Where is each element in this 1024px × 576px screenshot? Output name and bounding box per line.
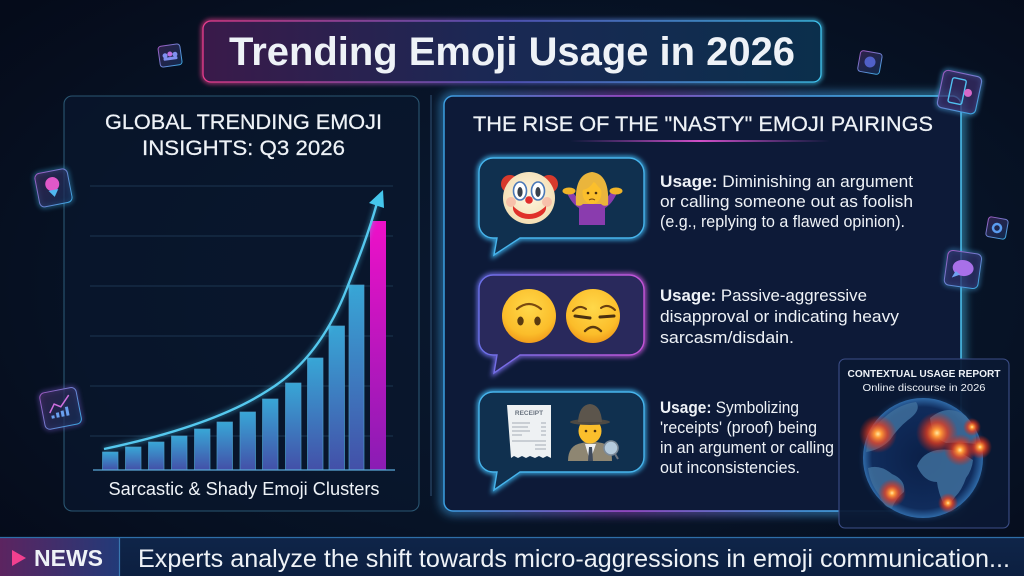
title banner bbox=[203, 21, 821, 82]
icon: detective bbox=[568, 404, 618, 461]
icon: unamused face bbox=[566, 289, 620, 343]
usage text 3: 'receipts' (proof) being bbox=[660, 419, 817, 437]
usage text 3: in an argument or calling bbox=[660, 439, 834, 457]
floating icon: phone bbox=[936, 69, 983, 115]
usage text 1: or calling someone out as foolish bbox=[660, 193, 913, 211]
icon: play triangle bbox=[12, 550, 26, 566]
usage text 3: Usage: Symbolizing bbox=[660, 399, 799, 417]
trend arrow bbox=[104, 190, 384, 449]
icon: clown face bbox=[501, 172, 558, 224]
report heading: Online discourse in 2026 bbox=[862, 382, 986, 394]
report heading bbox=[848, 368, 1001, 394]
bar chart bbox=[90, 186, 395, 470]
panel: global trending emoji insights bbox=[64, 96, 419, 511]
floating icon: globe small bbox=[857, 50, 883, 75]
icon: shrugging woman bbox=[562, 172, 622, 225]
report heading: CONTEXTUAL USAGE REPORT bbox=[848, 368, 1001, 380]
speech bubble: upside-down and unamused bbox=[479, 275, 644, 373]
panel heading bbox=[105, 110, 382, 160]
panel divider bbox=[430, 95, 432, 496]
news label: NEWS bbox=[34, 545, 103, 571]
floating icon: trend chart bbox=[39, 387, 82, 430]
floating icon: balloon bbox=[34, 168, 73, 208]
usage text 3: out inconsistencies. bbox=[660, 459, 800, 477]
usage text 2: Usage: Passive-aggressive bbox=[660, 287, 867, 305]
floating icon: people bbox=[158, 44, 182, 67]
panel heading: GLOBAL TRENDING EMOJI bbox=[105, 110, 382, 134]
usage text 2 bbox=[660, 287, 900, 347]
icon: upside-down face bbox=[502, 289, 556, 343]
usage text 2: disapproval or indicating heavy bbox=[660, 308, 900, 326]
floating icon: chat bubble bbox=[944, 250, 982, 289]
globe with hotspots bbox=[859, 397, 992, 519]
chart caption: Sarcastic & Shady Emoji Clusters bbox=[108, 479, 380, 499]
usage text 1 bbox=[660, 173, 913, 231]
panel: contextual usage report bbox=[839, 359, 1009, 528]
speech bubble: clown and shrug bbox=[479, 158, 644, 255]
icon: receipt bbox=[507, 405, 551, 458]
panel heading: INSIGHTS: Q3 2026 bbox=[142, 136, 345, 160]
usage text 1: Usage: Diminishing an argument bbox=[660, 173, 913, 191]
icon: receipt: RECEIPT bbox=[515, 410, 543, 417]
headline: Experts analyze the shift towards micro-aggressions in emoji communication... bbox=[138, 545, 1010, 573]
usage text 1: (e.g., replying to a flawed opinion). bbox=[660, 213, 905, 231]
floating icon: gear bbox=[985, 216, 1009, 240]
title banner: Trending Emoji Usage in 2026 bbox=[229, 30, 795, 74]
speech bubble: receipt and detective bbox=[479, 392, 644, 490]
panel: the rise of the nasty emoji pairings bbox=[444, 96, 961, 511]
panel heading: THE RISE OF THE "NASTY" EMOJI PAIRINGS bbox=[473, 112, 933, 136]
news ticker bbox=[0, 537, 1024, 576]
usage text 2: sarcasm/disdain. bbox=[660, 329, 794, 347]
usage text 3 bbox=[660, 399, 834, 477]
